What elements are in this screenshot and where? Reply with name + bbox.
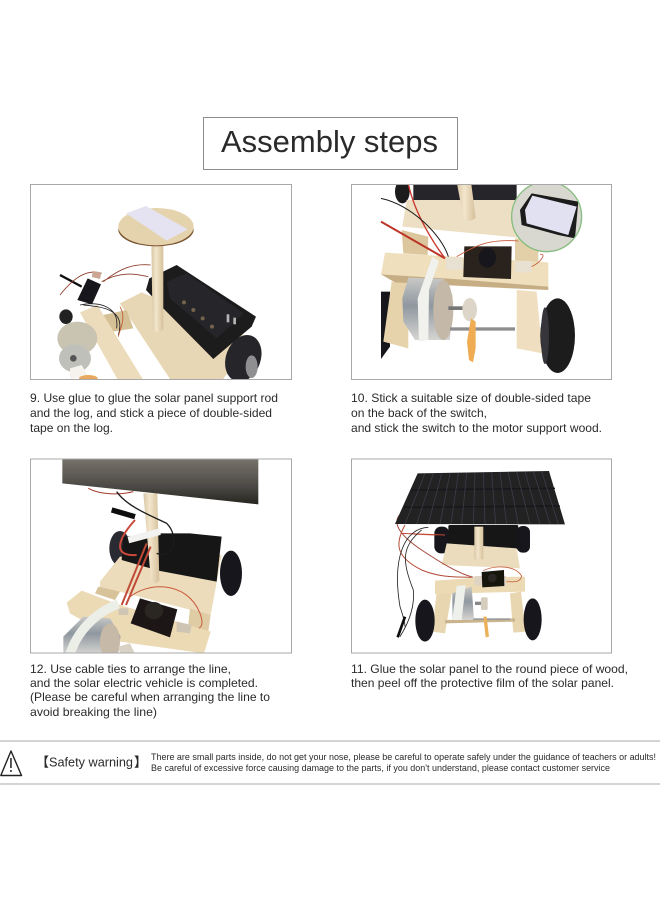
rear wood posts (402, 230, 538, 263)
motor with tie (452, 585, 474, 620)
wires and cable ties (88, 488, 202, 630)
rear wheels (434, 526, 530, 553)
safety band rules (0, 740, 660, 784)
support rod (457, 185, 476, 221)
safety warning text: Be careful of excessive force causing damage to the parts, if you don't understand, please contact customer service (151, 763, 610, 773)
safety warning text: There are small parts inside, do not get your nose, please be careful to operate safely under the guidance of teachers or adults! (151, 752, 656, 762)
panel: step 10 photo (381, 180, 582, 373)
front cross beam (435, 577, 525, 594)
safety warning heading: 】 (134, 754, 147, 770)
caption: step 12: 12. Use cable ties to arrange the line, (30, 662, 231, 676)
caption: step 12: avoid breaking the line) (30, 705, 157, 719)
white cable tie (418, 257, 439, 342)
right rear wheel (220, 551, 242, 596)
switch (119, 598, 192, 637)
double-sided tape (126, 206, 188, 241)
battery back (395, 185, 517, 204)
wooden base board (120, 292, 252, 379)
right wood leg (517, 290, 542, 353)
title: Assembly steps (221, 124, 438, 159)
left wood beam (80, 305, 143, 379)
white pulley (462, 298, 477, 321)
inset magnifier circle (512, 182, 582, 252)
switch (474, 570, 506, 587)
caption: step 10: on the back of the switch, (351, 406, 487, 420)
shafts (448, 306, 515, 331)
switch and wires (60, 265, 151, 337)
round wood disc (118, 208, 194, 246)
title (204, 118, 458, 170)
support rod (151, 243, 163, 332)
caption: step 12: (Please be careful when arranging the line to (30, 690, 270, 704)
left wheel (59, 309, 73, 324)
panel frame: step 11 (352, 459, 612, 653)
safety warning text (151, 752, 656, 773)
base wood board (100, 555, 222, 615)
motor with tape (57, 322, 98, 382)
wood board (442, 543, 520, 568)
caption: step 12: and the solar electric vehicle is completed. (30, 676, 258, 690)
connecting wood posts (95, 587, 211, 632)
front wood beam (67, 591, 211, 653)
caption: step 9: and the log, and stick a piece of double-sided (30, 406, 272, 420)
panel: step 9 photo (57, 206, 268, 387)
caption: step 9: 9. Use glue to glue the solar panel support rod (30, 391, 278, 405)
wires (381, 184, 543, 267)
motor support beam (381, 253, 548, 290)
support rod (474, 527, 483, 559)
caption: step 10: and stick the switch to the motor support wood. (351, 421, 602, 435)
panel: step 12 photo (62, 459, 258, 660)
caption: step 11 (351, 662, 628, 690)
wood legs (432, 592, 526, 633)
wires (397, 512, 522, 637)
solar panel underside (62, 459, 258, 504)
left black wheel (381, 292, 390, 359)
right wheel (225, 335, 262, 379)
battery holder (146, 265, 256, 359)
shaft, pulley and gear (473, 597, 510, 637)
panel: step 11 photo (395, 471, 565, 642)
panel frame: step 10 (352, 184, 612, 380)
right wheel (540, 298, 575, 373)
top wood board (402, 200, 527, 238)
orange gear (467, 318, 476, 362)
left wood leg (383, 282, 408, 348)
caption: step 10: 10. Stick a suitable size of double-sided tape (351, 391, 591, 405)
battery holder (448, 525, 518, 549)
caption: step 12 (30, 662, 270, 719)
icon: warning triangle (1, 751, 22, 776)
safety warning heading: Safety warning (49, 754, 133, 770)
battery holder (122, 533, 222, 582)
caption: step 9: tape on the log. (30, 421, 113, 435)
motor with cable tie (63, 604, 135, 660)
motor (402, 278, 453, 340)
switch (446, 246, 532, 279)
solar panel (395, 471, 565, 524)
caption: step 10 (351, 391, 602, 435)
left rear wheel (109, 531, 128, 564)
panel frame: step 9 (30, 184, 292, 380)
support rod (143, 493, 159, 583)
front wheels (415, 598, 542, 642)
caption: step 11: then peel off the protective film of the solar panel. (351, 676, 614, 690)
caption: step 11: 11. Glue the solar panel to the round piece of wood, (351, 662, 628, 676)
safety warning heading: 【 (36, 754, 49, 770)
panel frame: step 12 (30, 459, 292, 653)
caption: step 9 (30, 391, 278, 435)
